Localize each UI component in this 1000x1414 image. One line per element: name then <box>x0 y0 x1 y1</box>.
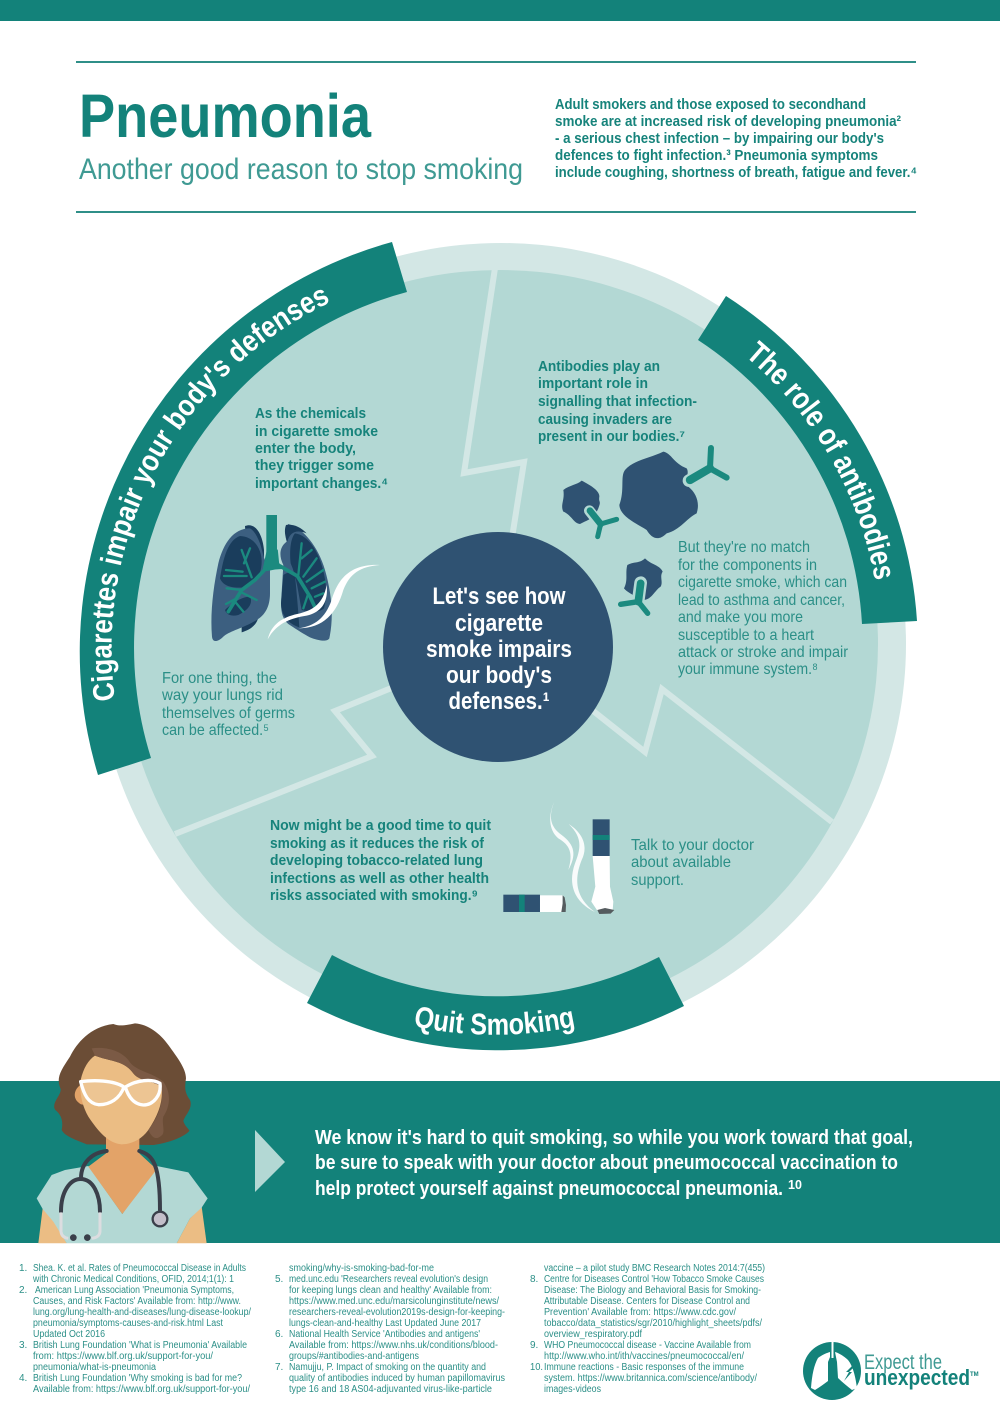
arrow <box>255 1130 285 1192</box>
band: cigarettes impair your body's defenses: Cigarettes impair your body's defenses <box>90 290 328 700</box>
intro text block: - a serious chest infection – by impairing our body's <box>555 130 884 147</box>
banner text <box>315 1127 913 1200</box>
icon: nurse <box>37 1023 208 1243</box>
references column 2: lungs-clean-and-healthy Last Updated June 2017 <box>289 1318 481 1329</box>
references column 1: Shea. K. et al. Rates of Pneumococcal Disease in Adults <box>33 1263 246 1274</box>
references column 1: Available from: https://www.blf.org.uk/support-for-you/ <box>33 1384 250 1395</box>
text: chemicals <box>255 405 388 492</box>
text: antibodies role: causing invaders are <box>538 411 672 428</box>
text: quit now <box>270 817 491 904</box>
logo: expect the unexpected: unexpected <box>864 1365 970 1390</box>
text: antibodies role <box>538 358 697 445</box>
references column 2: groups/#antibodies-and-antigens <box>289 1351 419 1362</box>
text: lungs germs: way your lungs rid <box>161 687 283 704</box>
references column 2: 7. <box>275 1362 283 1373</box>
references column 1: pneumonia/what-is-pneumonia <box>33 1362 156 1373</box>
references column 1: pneumonia/symptoms-causes-and-risk.html Last <box>33 1318 223 1329</box>
center circle: cigarette <box>455 610 543 637</box>
references column 3: Centre for Diseases Control 'How Tobacco Smoke Causes <box>544 1274 764 1285</box>
band: quit smoking <box>307 955 684 1050</box>
references column 3: images-videos <box>544 1384 601 1395</box>
logo: expect the unexpected: TM <box>970 1372 979 1378</box>
text: chemicals: enter the body, <box>255 440 356 457</box>
intro text block: defences to fight infection.³ Pneumonia symptoms <box>555 147 878 164</box>
references column 3: http://www.who.int/ith/vaccines/pneumococcal/en/ <box>544 1351 744 1362</box>
text: lungs germs: themselves of germs <box>162 705 295 722</box>
logo: expect the unexpected <box>803 1342 979 1400</box>
text: quit now: smoking as it reduces the risk of <box>270 835 485 852</box>
references column 3: 9. <box>530 1340 538 1351</box>
band: quit smoking: Quit Smoking <box>416 1007 574 1035</box>
text: quit now: infections as well as other health <box>270 870 489 887</box>
band: the role of antibodies: The role of antibodies <box>750 340 890 580</box>
banner text: help protect yourself against pneumococcal pneumonia. <box>315 1178 783 1200</box>
references column 2: 6. <box>275 1329 283 1340</box>
banner text: be sure to speak with your doctor about pneumococcal vaccination to <box>315 1152 898 1174</box>
text: no match: But they're no match <box>678 539 810 556</box>
banner text: We know it's hard to quit smoking, so while you work toward that goal, <box>315 1127 913 1149</box>
text: no match: your immune system.⁸ <box>678 661 818 678</box>
text: no match: for the components in <box>678 557 817 574</box>
text: quit now: Now might be a good time to quit <box>270 817 491 834</box>
text: chemicals: As the chemicals <box>255 405 366 422</box>
text: no match: cigarette smoke, which can <box>678 574 847 591</box>
text: antibodies role: signalling that infection- <box>538 393 697 410</box>
references column 1: British Lung Foundation 'What is Pneumonia' Available <box>33 1340 247 1351</box>
references column 3: 8. <box>530 1274 538 1285</box>
icon: cigarettes <box>503 802 614 914</box>
references column 3: Prevention' Available from: https://www.cdc.gov/ <box>544 1307 736 1318</box>
text: no match <box>678 539 849 678</box>
text: antibodies role: present in our bodies.⁷ <box>538 428 685 445</box>
bottom banner <box>0 1081 1000 1243</box>
text: quit now: developing tobacco-related lung <box>270 852 483 869</box>
references column 1: 2. <box>19 1285 27 1296</box>
center circle: our body's <box>446 662 552 689</box>
references column 3 <box>530 1263 765 1395</box>
text: chemicals: important changes.⁴ <box>255 475 388 492</box>
references column 3: overview_respiratory.pdf <box>544 1329 642 1340</box>
references column 2: smoking/why-is-smoking-bad-for-me <box>289 1263 434 1274</box>
references column 2 <box>275 1263 505 1395</box>
references column 2: med.unc.edu 'Researchers reveal evolution's design <box>289 1274 488 1285</box>
intro text block: smoke are at increased risk of developing pneumonia² <box>555 113 901 130</box>
band: cigarettes impair your body's defenses <box>80 242 407 775</box>
text: lungs germs: For one thing, the <box>162 670 277 687</box>
references column 3: Attributable Disease. Centers for Disease Control and <box>544 1296 750 1307</box>
text: antibodies role: Antibodies play an <box>538 358 660 375</box>
references column 1: lung.org/lung-health-and-diseases/lung-disease-lookup/ <box>33 1307 251 1318</box>
references column 3: Immune reactions - Basic responses of the immune <box>544 1362 744 1373</box>
text: lungs germs <box>161 670 295 739</box>
text: no match: attack or stroke and impair <box>678 644 849 661</box>
text: quit now: risks associated with smoking.⁹ <box>270 887 478 904</box>
banner text: 10 <box>788 1178 802 1192</box>
intro text block: include coughing, shortness of breath, fatigue and fever.⁴ <box>555 164 917 181</box>
center circle <box>383 532 613 762</box>
references column 1: British Lung Foundation 'Why smoking is bad for me? <box>33 1373 242 1384</box>
references column 2: researchers-reveal-evolution2019s-design-for-keeping- <box>289 1307 505 1318</box>
references column 2: Namujju, P. Impact of smoking on the quantity and <box>289 1362 486 1373</box>
references column 3: tobacco/data_statistics/sgr/2010/highlight_sheets/pdfs/ <box>544 1318 762 1329</box>
references column 1: from: https://www.blf.org.uk/support-for-you/ <box>33 1351 213 1362</box>
center circle: smoke impairs <box>426 636 572 663</box>
intro text block <box>555 96 917 181</box>
references column 1: Causes, and Risk Factors' Available from: http://www. <box>33 1296 241 1307</box>
references column 2: National Health Service 'Antibodies and antigens' <box>289 1329 480 1340</box>
references column 2: quality of antibodies induced by human papillomavirus <box>289 1373 505 1384</box>
references column 2: for keeping lungs clean and healthy' Available from: <box>289 1285 492 1296</box>
references column 1: 1. <box>19 1263 27 1274</box>
icon: lungs with smoke <box>211 515 380 641</box>
references column 2: Available from: https://www.nhs.uk/conditions/blood- <box>289 1340 498 1351</box>
references column 1: 4. <box>19 1373 27 1384</box>
text: chemicals: in cigarette smoke <box>255 423 378 440</box>
text: lungs germs: can be affected.⁵ <box>162 722 269 739</box>
band: the role of antibodies <box>698 296 917 624</box>
icon: antibodies and invaders <box>562 448 727 613</box>
references column 1: with Chronic Medical Conditions, OFID, 2014;1(1): 1 <box>32 1274 234 1285</box>
text: no match: lead to asthma and cancer, <box>678 592 845 609</box>
logo: expect the unexpected: Expect the <box>864 1351 942 1374</box>
text: talk to doctor: about available <box>631 854 731 871</box>
text: no match: and make you more <box>678 609 803 626</box>
references column 2: https://www.med.unc.edu/marsicolunginstitute/news/ <box>289 1296 499 1307</box>
references column 3: vaccine – a pilot study BMC Research Notes 2014:7(455) <box>544 1263 765 1274</box>
center circle: Let's see how <box>432 583 566 610</box>
text: talk to doctor: Talk to your doctor <box>631 837 755 854</box>
text: antibodies role: important role in <box>538 375 648 392</box>
references column 3: WHO Pneumococcal disease - Vaccine Available from <box>544 1340 751 1351</box>
references column 3: Disease: The Biology and Behavioral Basis for Smoking- <box>544 1285 761 1296</box>
references column 2: type 16 and 18 AS04-adjuvanted virus-like-particle <box>289 1384 492 1395</box>
center circle: defenses.¹ <box>448 688 550 715</box>
top bar <box>0 0 1000 21</box>
subtitle: Another good reason to stop smoking <box>79 153 523 186</box>
references column 2: 5. <box>275 1274 283 1285</box>
references column 3: system. https://www.britannica.com/science/antibody/ <box>544 1373 757 1384</box>
outer pale ring <box>96 243 906 1045</box>
references column 1: 3. <box>19 1340 27 1351</box>
text: talk to doctor: support. <box>631 872 684 889</box>
references column 1: Updated Oct 2016 <box>33 1329 105 1340</box>
title: Pneumonia <box>79 82 372 150</box>
references column 1 <box>19 1263 251 1395</box>
references column 1: American Lung Association 'Pneumonia Symptoms, <box>35 1285 234 1296</box>
segment dividers <box>175 268 832 834</box>
intro text block: Adult smokers and those exposed to secondhand <box>555 96 866 113</box>
inner disc <box>122 270 878 1018</box>
text: talk to doctor <box>631 837 755 889</box>
references column 3: 10. <box>530 1362 543 1373</box>
text: no match: susceptible to a heart <box>678 627 814 644</box>
text: chemicals: they trigger some <box>255 457 374 474</box>
